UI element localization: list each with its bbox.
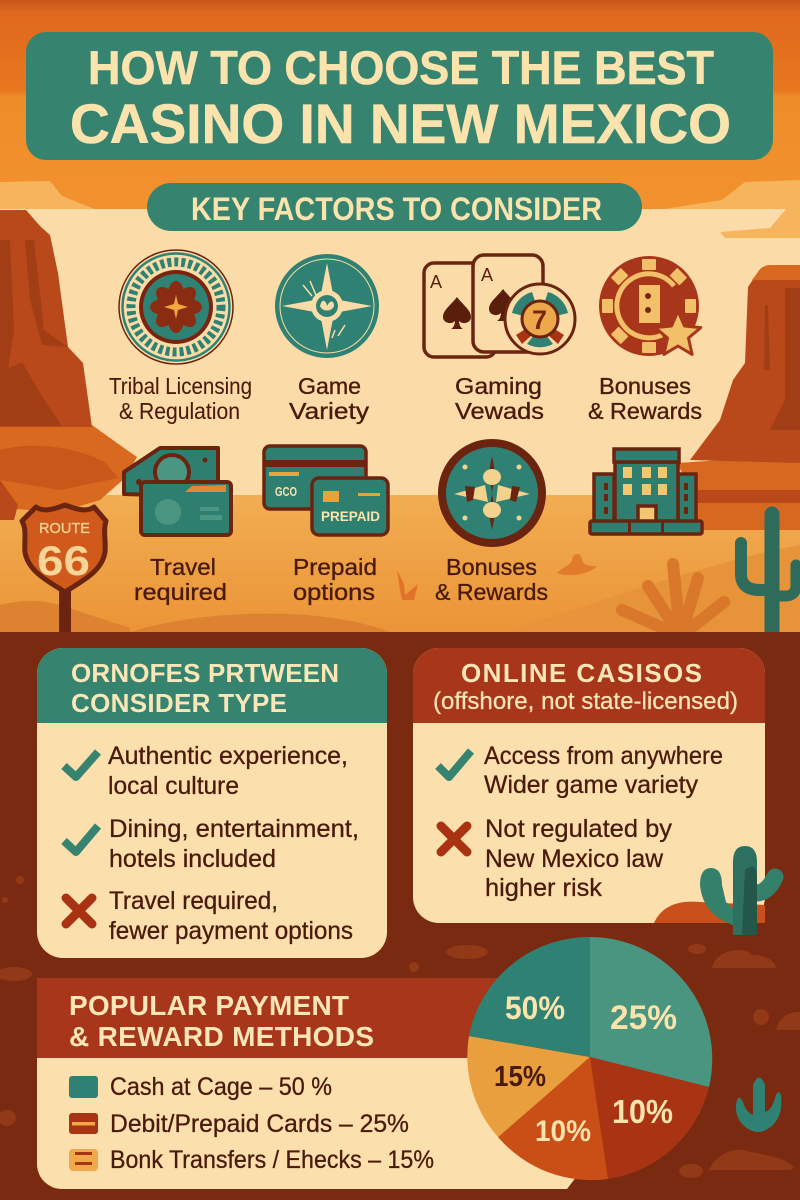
icon: small cactus sprout bbox=[736, 1078, 781, 1132]
text: dining and hotels: hotels included bbox=[109, 845, 276, 873]
ground mounds bbox=[0, 601, 130, 632]
text: dining and hotels bbox=[109, 815, 359, 873]
pie chart bbox=[467, 937, 712, 1180]
text: travel required: Travel required, bbox=[109, 887, 278, 915]
panel header: online casinos bbox=[413, 648, 765, 723]
label: prepaid options bbox=[293, 554, 377, 605]
icon: prepaid cards bbox=[264, 446, 388, 535]
panel header: online casinos: (offshore, not state-licensed) bbox=[433, 688, 738, 715]
icon: playing cards and chip: A bbox=[481, 265, 493, 285]
text: travel required: fewer payment options bbox=[109, 917, 353, 945]
label: game variety: Game bbox=[298, 373, 361, 399]
panel: online casinos bbox=[413, 648, 765, 923]
text: not regulated: New Mexico law bbox=[485, 845, 664, 873]
panel header: payment methods bbox=[37, 978, 517, 1058]
pie label 10 right: 10% bbox=[612, 1093, 673, 1130]
panel header: online casinos: ONLINE CASISOS bbox=[461, 658, 702, 688]
cactus: top right bbox=[741, 510, 796, 632]
shrub bbox=[622, 564, 724, 632]
icon: check bbox=[438, 751, 471, 777]
text: not regulated: Not regulated by bbox=[485, 815, 673, 843]
label: bonuses and rewards: Bonuses bbox=[599, 373, 691, 399]
icon: check bbox=[64, 752, 98, 777]
label: tribal licensing: & Regulation bbox=[119, 398, 240, 424]
label: travel required bbox=[134, 554, 227, 605]
label: bonuses and rewards bbox=[588, 373, 702, 424]
icon: compass badge bbox=[275, 254, 379, 358]
text: authentic experience bbox=[108, 742, 348, 800]
legend: cash at cage: Cash at Cage – 50 % bbox=[110, 1073, 332, 1101]
label: gaming vewads: Gaming bbox=[455, 373, 542, 399]
label: bonuses and rewards: & Rewards bbox=[588, 398, 702, 424]
icon: playing cards and chip bbox=[424, 255, 575, 357]
text: access and variety: Access from anywhere bbox=[484, 742, 723, 770]
panel header: payment methods: & REWARD METHODS bbox=[69, 1021, 374, 1052]
icon: playing cards and chip: A bbox=[430, 272, 442, 292]
label: game variety: Variety bbox=[289, 398, 370, 424]
legend: bank transfers: Bonk Transfers / Ehecks – 15% bbox=[110, 1146, 434, 1174]
icon: casino chip with star bbox=[599, 256, 701, 356]
title banner bbox=[26, 32, 773, 160]
label: gaming vewads: Vewads bbox=[455, 398, 544, 424]
label: tribal licensing: Tribal Licensing bbox=[109, 373, 252, 399]
label: travel required: Travel bbox=[150, 554, 216, 580]
pie label 15: 15% bbox=[494, 1061, 546, 1093]
text: not regulated: higher risk bbox=[485, 874, 602, 902]
title banner: HOW TO CHOOSE THE BEST bbox=[88, 41, 714, 94]
route 66 sign: 66 bbox=[37, 537, 90, 584]
label: gaming vewads bbox=[455, 373, 544, 424]
label: travel required: required bbox=[134, 579, 227, 605]
text: not regulated bbox=[485, 815, 673, 902]
label: bonuses and rewards second: Bonuses bbox=[446, 554, 537, 580]
icon: roulette wheel bbox=[438, 439, 546, 547]
panel header: consider type bbox=[37, 648, 387, 723]
mound bbox=[654, 902, 765, 923]
pie label 10 bottom: 10% bbox=[535, 1115, 591, 1148]
subheading pill: key factors: KEY FACTORS TO CONSIDER bbox=[191, 191, 602, 227]
panel: payment methods bbox=[37, 978, 580, 1189]
icon: playing cards and chip: 7 bbox=[532, 305, 547, 335]
icon: cross bbox=[441, 826, 467, 852]
panel header: consider type: CONSIDER TYPE bbox=[71, 688, 287, 718]
text: authentic experience: Authentic experience, bbox=[108, 742, 348, 770]
route 66 sign bbox=[22, 505, 106, 632]
icon: check bbox=[64, 826, 98, 852]
text: access and variety: Wider game variety bbox=[484, 771, 698, 799]
legend: debit and prepaid cards: Debit/Prepaid Cards – 25% bbox=[110, 1110, 409, 1138]
route 66 sign: ROUTE bbox=[39, 520, 90, 537]
text: access and variety bbox=[484, 742, 723, 799]
left mesa bbox=[0, 210, 137, 520]
title banner: CASINO IN NEW MEXICO bbox=[70, 92, 731, 155]
label: prepaid options: options bbox=[293, 579, 375, 605]
label: prepaid options: Prepaid bbox=[293, 554, 377, 580]
icon: prepaid cards: GCO bbox=[275, 484, 297, 499]
panel header: payment methods: POPULAR PAYMENT bbox=[69, 990, 349, 1021]
icon: cash and wallet bbox=[124, 448, 231, 535]
icon: tribal seal bbox=[119, 250, 233, 364]
label: tribal licensing bbox=[109, 373, 252, 424]
icon: casino hotel building bbox=[590, 449, 702, 534]
icon: cross bbox=[66, 898, 92, 924]
panel: tribal casinos bbox=[37, 648, 387, 958]
pie label 25: 25% bbox=[610, 999, 677, 1037]
icon: prepaid cards: PREPAID bbox=[321, 508, 380, 524]
label: game variety bbox=[289, 373, 370, 424]
cactus: panel corner bbox=[700, 846, 775, 935]
panel header: consider type: ORNOFES PRTWEEN bbox=[71, 658, 339, 688]
text: authentic experience: local culture bbox=[108, 772, 239, 800]
pie label 50: 50% bbox=[505, 990, 565, 1026]
label: bonuses and rewards second: & Rewards bbox=[435, 579, 548, 605]
text: travel required bbox=[109, 887, 353, 945]
subheading pill: key factors bbox=[147, 183, 642, 231]
label: bonuses and rewards second bbox=[435, 554, 548, 605]
right mesa bbox=[677, 265, 800, 530]
text: dining and hotels: Dining, entertainment, bbox=[109, 815, 359, 843]
bottom ground bbox=[0, 632, 800, 1200]
